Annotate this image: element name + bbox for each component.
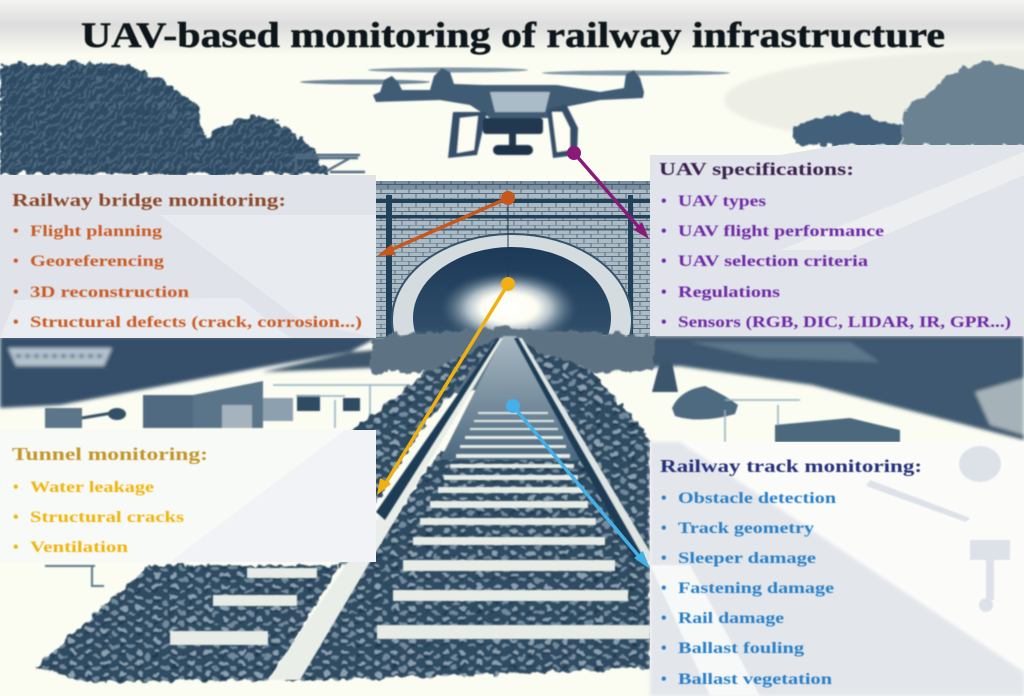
panel: railway bridge monitoring bbox=[0, 175, 376, 338]
arrow: bridge (orange) bbox=[377, 191, 515, 256]
panel: tunnel monitoring bbox=[0, 430, 376, 562]
light bbox=[441, 272, 577, 344]
list: • bbox=[661, 610, 667, 627]
list bbox=[661, 193, 1011, 331]
heading: Railway bridge monitoring: bbox=[12, 190, 286, 210]
heading: UAV specifications: bbox=[659, 159, 854, 179]
platform equipment: right bbox=[652, 362, 900, 442]
ground at tunnel mouth bbox=[372, 328, 654, 392]
left ballast shoulder bbox=[35, 338, 498, 682]
list: • bbox=[661, 253, 667, 270]
list: • bbox=[661, 550, 667, 567]
list: • bbox=[13, 509, 19, 526]
list: • bbox=[13, 479, 19, 496]
list: • bbox=[661, 490, 667, 507]
sky tint: right bbox=[724, 50, 1024, 150]
line in tunnel bbox=[507, 205, 509, 280]
list: Ventilation bbox=[30, 539, 128, 556]
gantry: left bbox=[296, 155, 365, 172]
platform equipment: left bbox=[45, 381, 410, 586]
list bbox=[661, 490, 836, 688]
list: Regulations bbox=[678, 284, 780, 301]
list: • bbox=[661, 284, 667, 301]
list: Water leakage bbox=[30, 479, 154, 496]
arrow: track (blue) bbox=[506, 399, 650, 569]
right rail bbox=[518, 338, 655, 560]
center track bed shade bbox=[440, 336, 590, 460]
parapet bands bbox=[376, 181, 650, 338]
list: Structural cracks bbox=[30, 509, 184, 526]
panel: railway track monitoring bbox=[650, 442, 1024, 696]
right ballast shoulder bbox=[525, 345, 650, 560]
list: Sensors (RGB, DIC, LIDAR, IR, GPR...) bbox=[678, 314, 1011, 331]
heading: Tunnel monitoring: bbox=[12, 444, 208, 464]
list: Rail damage bbox=[678, 610, 784, 627]
list: • bbox=[661, 314, 667, 331]
trees: left bbox=[0, 64, 328, 174]
list: UAV selection criteria bbox=[678, 253, 868, 270]
left rail bbox=[268, 338, 503, 680]
list: • bbox=[661, 671, 667, 688]
arrow: tunnel (yellow) bbox=[377, 277, 515, 495]
list: UAV flight performance bbox=[678, 223, 884, 240]
list: • bbox=[661, 193, 667, 210]
list bbox=[13, 223, 362, 331]
background embankment: left train and shadow band bbox=[0, 336, 472, 408]
track bed bbox=[285, 450, 650, 680]
list: Ballast vegetation bbox=[678, 671, 832, 688]
list bbox=[13, 479, 184, 556]
opening bbox=[413, 247, 611, 335]
title: UAV-based monitoring of railway infrastructure bbox=[81, 15, 945, 55]
trees: right bbox=[794, 63, 1024, 146]
heading: Railway track monitoring: bbox=[660, 456, 922, 476]
list: Ballast fouling bbox=[678, 640, 804, 657]
title band bbox=[0, 0, 1024, 56]
panel: UAV specifications bbox=[650, 145, 1024, 336]
list: Flight planning bbox=[30, 223, 162, 240]
list: • bbox=[13, 539, 19, 556]
list: Track geometry bbox=[678, 520, 814, 537]
icon: drone bbox=[300, 68, 730, 158]
list: Structural defects (crack, corrosion...) bbox=[30, 314, 362, 331]
list: UAV types bbox=[678, 193, 766, 210]
list: • bbox=[13, 223, 19, 240]
list: • bbox=[661, 640, 667, 657]
arrow: UAV (purple) bbox=[567, 146, 649, 239]
list: Sleeper damage bbox=[678, 550, 816, 567]
faded equipment bbox=[866, 446, 1010, 612]
list: • bbox=[13, 314, 19, 331]
list: • bbox=[661, 223, 667, 240]
background embankment: right bbox=[590, 336, 1024, 440]
list: • bbox=[661, 520, 667, 537]
list: • bbox=[661, 580, 667, 597]
list: Fastening damage bbox=[678, 580, 834, 597]
list: Obstacle detection bbox=[678, 490, 836, 507]
list: • bbox=[13, 253, 19, 270]
arch ring bbox=[391, 233, 633, 335]
tunnel portal bbox=[376, 181, 650, 338]
list: • bbox=[13, 284, 19, 301]
list: 3D reconstruction bbox=[30, 284, 189, 301]
list: Georeferencing bbox=[30, 253, 164, 270]
sleepers bbox=[170, 412, 650, 645]
